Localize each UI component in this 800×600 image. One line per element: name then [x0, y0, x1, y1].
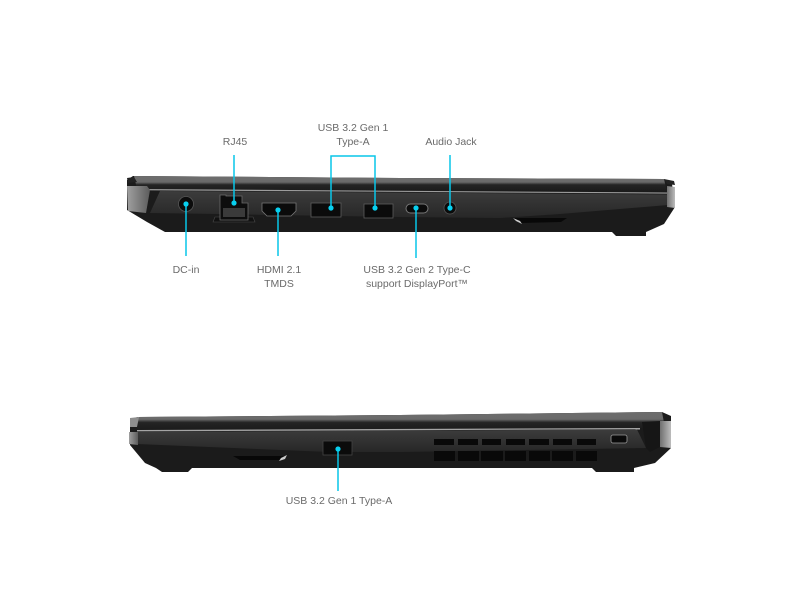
- port: USB Type-C: [406, 204, 428, 213]
- security lock slot: [611, 435, 627, 443]
- port: RJ45: [213, 195, 255, 222]
- laptop: left side view: [127, 176, 675, 236]
- port panel: [137, 430, 646, 452]
- right hinge: [667, 186, 675, 208]
- laptop: right side view: [129, 412, 671, 472]
- callout: USB 3.2 Gen 1 Type-A bracket: Type-A: [336, 136, 370, 148]
- callout: USB 3.2 Gen 2 Type-C: support DisplayPort™: [366, 278, 468, 290]
- right hinge: [660, 421, 671, 448]
- card reader slot: [513, 218, 567, 223]
- port: USB Type-A: [311, 203, 341, 217]
- chassis: [127, 176, 675, 236]
- chassis: [130, 412, 671, 472]
- callout: DC-in: DC-in: [173, 264, 200, 276]
- callout: Audio Jack: Audio Jack: [425, 136, 477, 148]
- port: HDMI: [262, 203, 296, 216]
- left hinge: [127, 186, 150, 213]
- upper vent row: [434, 439, 596, 445]
- callout: DC-in: [173, 201, 200, 276]
- card reader slot: [233, 456, 287, 460]
- callout: USB 3.2 Gen 2 Type-C: USB 3.2 Gen 2 Type-C: [363, 264, 471, 276]
- callout: HDMI 2.1 TMDS: TMDS: [264, 278, 294, 290]
- callout: USB 3.2 Gen 2 Type-C: [363, 205, 471, 290]
- callout: RJ45: [223, 136, 247, 206]
- callout: USB 3.2 Gen 1 Type-A: USB 3.2 Gen 1 Type-A: [286, 495, 392, 507]
- callout: USB 3.2 Gen 1 Type-A: [286, 446, 392, 507]
- lid: [134, 176, 667, 192]
- port: audio jack: [444, 202, 456, 214]
- port: USB Type-A: [364, 204, 393, 218]
- callout: USB 3.2 Gen 1 Type-A bracket: [318, 122, 388, 211]
- left hinge: [129, 432, 138, 445]
- port: DC-in: [178, 196, 194, 212]
- callout: HDMI 2.1 TMDS: HDMI 2.1: [257, 264, 301, 276]
- callout: HDMI 2.1 TMDS: [257, 207, 301, 290]
- lid: [137, 412, 665, 431]
- lid edge highlight: [137, 428, 640, 431]
- lower vent row: [434, 451, 597, 461]
- port: USB Type-A: [323, 441, 352, 455]
- callout: Audio Jack: [425, 136, 477, 211]
- lid edge highlight: [137, 189, 667, 194]
- callout: RJ45: RJ45: [223, 136, 247, 148]
- port panel: [150, 191, 668, 218]
- callout: USB 3.2 Gen 1 Type-A bracket: USB 3.2 Gen 1: [318, 122, 388, 134]
